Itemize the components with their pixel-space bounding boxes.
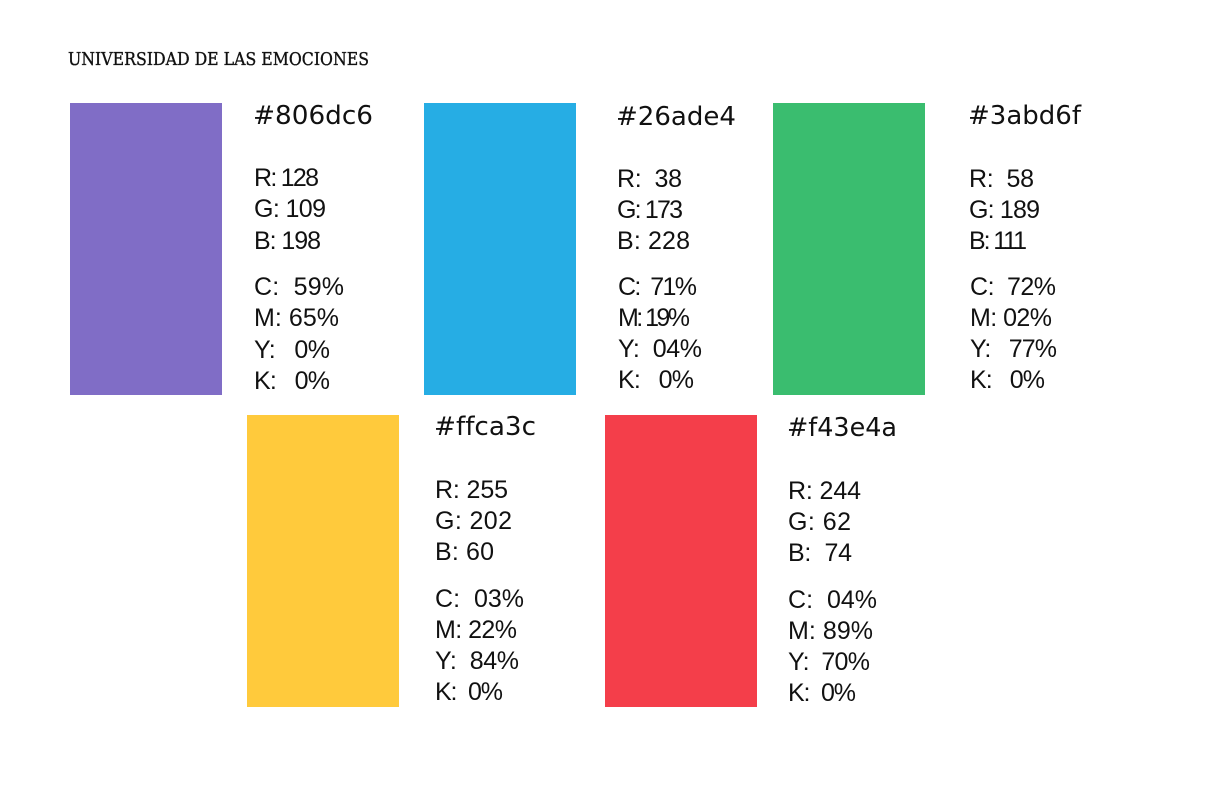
colour block purple <box>70 103 222 395</box>
panel: red swatch <box>605 413 897 707</box>
colour values purple: K: 0% <box>254 367 330 395</box>
colour values blue: R: 38 <box>617 165 682 193</box>
colour values green: #3abd6f <box>968 101 1082 131</box>
colour values green: K: 0% <box>970 366 1045 394</box>
title: UNIVERSIDAD DE LAS EMOCIONES <box>68 50 369 70</box>
colour block green <box>773 103 925 395</box>
colour values green: C: 72% <box>970 273 1056 301</box>
colour values purple: M: 65% <box>254 304 339 332</box>
panel: yellow swatch <box>247 412 536 707</box>
colour values red: K: 0% <box>788 679 856 707</box>
colour values blue <box>616 102 736 394</box>
colour block blue <box>424 103 576 395</box>
colour values yellow: R: 255 <box>435 476 508 504</box>
colour values red: Y: 70% <box>788 648 870 676</box>
colour values red: M: 89% <box>788 617 873 645</box>
colour values red: C: 04% <box>788 586 877 614</box>
colour values red: #f43e4a <box>787 413 897 443</box>
colour values green: M: 02% <box>970 304 1052 332</box>
colour values red: G: 62 <box>788 508 851 536</box>
colour values yellow: K: 0% <box>435 678 503 706</box>
colour values red: R: 244 <box>788 477 861 505</box>
colour values green <box>968 101 1082 394</box>
colour values red: B: 74 <box>788 539 852 567</box>
colour values green: G: 189 <box>969 196 1040 224</box>
colour values purple: C: 59% <box>254 273 344 301</box>
colour values yellow: C: 03% <box>435 585 524 613</box>
colour values purple: B: 198 <box>254 227 321 255</box>
colour values yellow <box>434 412 536 706</box>
panel: blue swatch <box>424 102 736 395</box>
colour values purple: #806dc6 <box>253 101 373 131</box>
colour values blue: K: 0% <box>618 366 694 394</box>
colour block yellow <box>247 415 399 707</box>
colour values yellow: G: 202 <box>435 507 512 535</box>
panel: purple swatch <box>70 101 373 395</box>
colour values purple: R: 128 <box>254 164 319 192</box>
colour values purple <box>253 101 373 395</box>
colour values yellow: Y: 84% <box>435 647 519 675</box>
colour values red <box>787 413 897 707</box>
colour values blue: B: 228 <box>617 227 690 255</box>
colour values blue: Y: 04% <box>618 335 702 363</box>
colour values blue: C: 71% <box>618 273 697 301</box>
colour values purple: Y: 0% <box>254 336 330 364</box>
colour values blue: M: 19% <box>618 304 690 332</box>
panel: green swatch <box>773 101 1082 395</box>
colour values purple: G: 109 <box>254 195 326 223</box>
colour values green: R: 58 <box>969 165 1034 193</box>
colour values green: B: 111 <box>969 227 1027 255</box>
colour values blue: G: 173 <box>617 196 683 224</box>
colour values yellow: #ffca3c <box>434 412 536 442</box>
colour values yellow: M: 22% <box>435 616 517 644</box>
colour values blue: #26ade4 <box>616 102 736 132</box>
colour values green: Y: 77% <box>970 335 1057 363</box>
colour values yellow: B: 60 <box>435 538 494 566</box>
colour block red <box>605 415 757 707</box>
